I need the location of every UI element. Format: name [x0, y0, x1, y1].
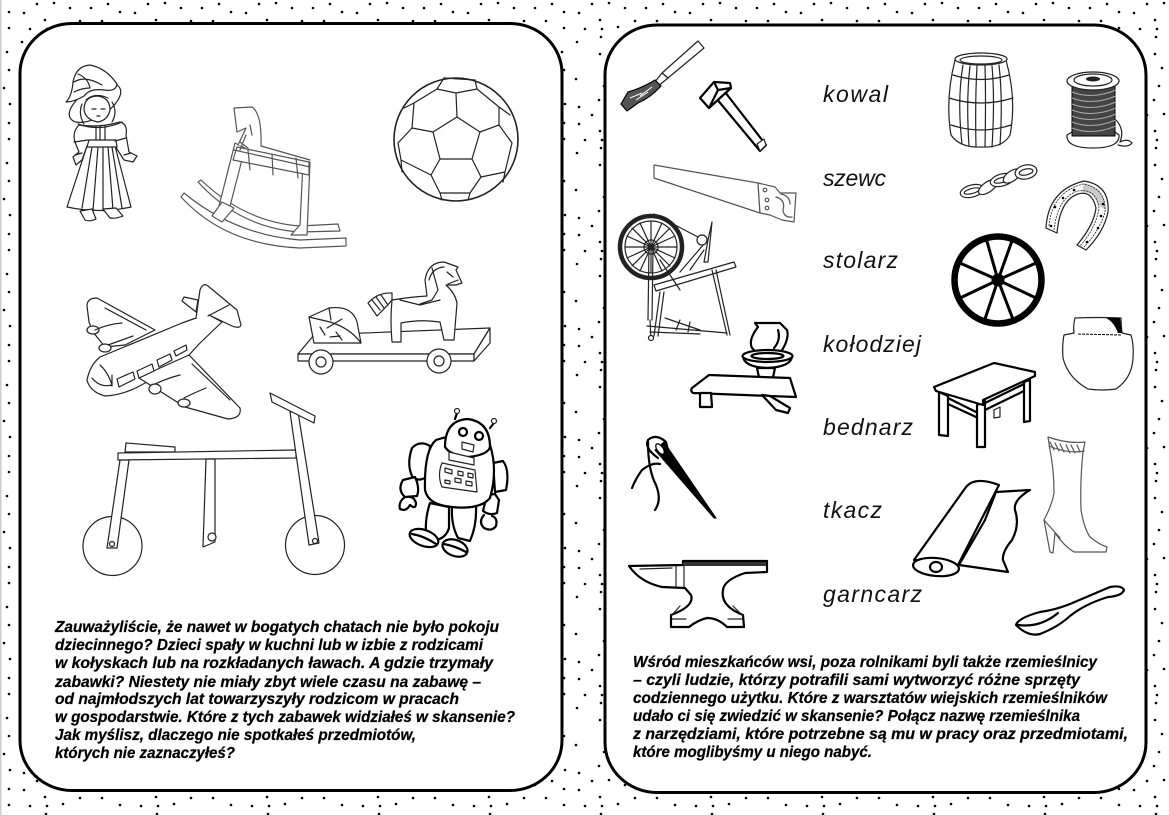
text: craftsmen question: – czyli ludzie, którzy potrafili sami wytworzyć różne sprzęty	[633, 672, 1081, 689]
icon: horse on wheeled platform	[298, 262, 490, 374]
text: toys question: od najmłodszych lat towarzyszyły rodzicom w pracach	[55, 691, 459, 708]
icon: spinning wheel	[620, 214, 736, 340]
icon: saw	[654, 165, 796, 222]
icon: barrel	[949, 53, 1013, 147]
icon: thread spool	[1067, 72, 1132, 148]
label: szewc: szewc	[823, 165, 886, 191]
text: toys question: zabawki? Niestety nie miały zbyt wiele czasu na zabawę –	[54, 674, 481, 691]
label: bednarz: bednarz	[823, 414, 914, 440]
icon: rocking horse	[181, 107, 346, 248]
icon: anvil	[629, 561, 767, 627]
icon: robot	[400, 408, 507, 560]
icon: soccer ball	[394, 78, 518, 201]
label: garncarz: garncarz	[823, 581, 922, 607]
icon: airplane	[87, 285, 241, 419]
text: toys question: w gospodarstwie. Które z tych zabawek widziałeś w skansenie?	[55, 709, 516, 726]
icon: hammer	[700, 82, 766, 151]
text: toys question: których nie zaznaczyłeś?	[55, 745, 236, 762]
text: craftsmen question: które moglibyśmy u niego nabyć.	[633, 744, 872, 761]
icon: wooden balance bike	[83, 393, 344, 576]
icon: chain	[959, 163, 1038, 200]
text: toys question: Zauważyliście, że nawet w bogatych chatach nie było pokoju	[54, 619, 500, 636]
text: toys question: Jak myślisz, dlaczego nie spotkałeś przedmiotów,	[55, 727, 416, 744]
icon: horseshoe	[1046, 181, 1108, 250]
icon: table	[934, 363, 1035, 447]
panel: craftsmen	[605, 25, 1146, 792]
text: craftsmen question: codziennego użytku. Które z warsztatów wiejskich rzemieślników	[633, 690, 1108, 707]
text: craftsmen question: udało ci się zwiedzić w skansenie? Połącz nazwę rzemieślnika	[633, 708, 1080, 725]
icon: fabric roll	[912, 481, 1030, 578]
icon: chisel	[621, 41, 704, 111]
panel: toys	[20, 24, 562, 790]
text: toys question: dziecinnego? Dzieci spały w kuchni lub w izbie z rodzicami	[55, 637, 484, 654]
text: craftsmen question	[632, 654, 1128, 761]
label: kowal: kowal	[823, 81, 889, 107]
label: tkacz: tkacz	[823, 497, 882, 523]
icon: potter's wheel	[691, 323, 796, 413]
icon: clay pot	[1063, 318, 1133, 390]
label: stolarz: stolarz	[823, 247, 898, 273]
label: kołodziej: kołodziej	[823, 331, 922, 357]
icon: boot	[1044, 437, 1107, 553]
icon: needle and thread	[632, 437, 716, 518]
icon: doll	[63, 65, 137, 221]
text: toys question	[54, 619, 516, 762]
text: craftsmen question: Wśród mieszkańców wsi, poza rolnikami byli także rzemieślnicy	[633, 654, 1098, 671]
text: toys question: w kołyskach lub na rozkładanych ławach. A gdzie trzymały	[55, 655, 494, 672]
icon: cart wheel	[954, 236, 1042, 324]
icon: wooden spoon	[1016, 586, 1124, 635]
text: craftsmen question: z narzędziami, które potrzebne są mu w pracy oraz przedmiotami,	[632, 726, 1128, 743]
